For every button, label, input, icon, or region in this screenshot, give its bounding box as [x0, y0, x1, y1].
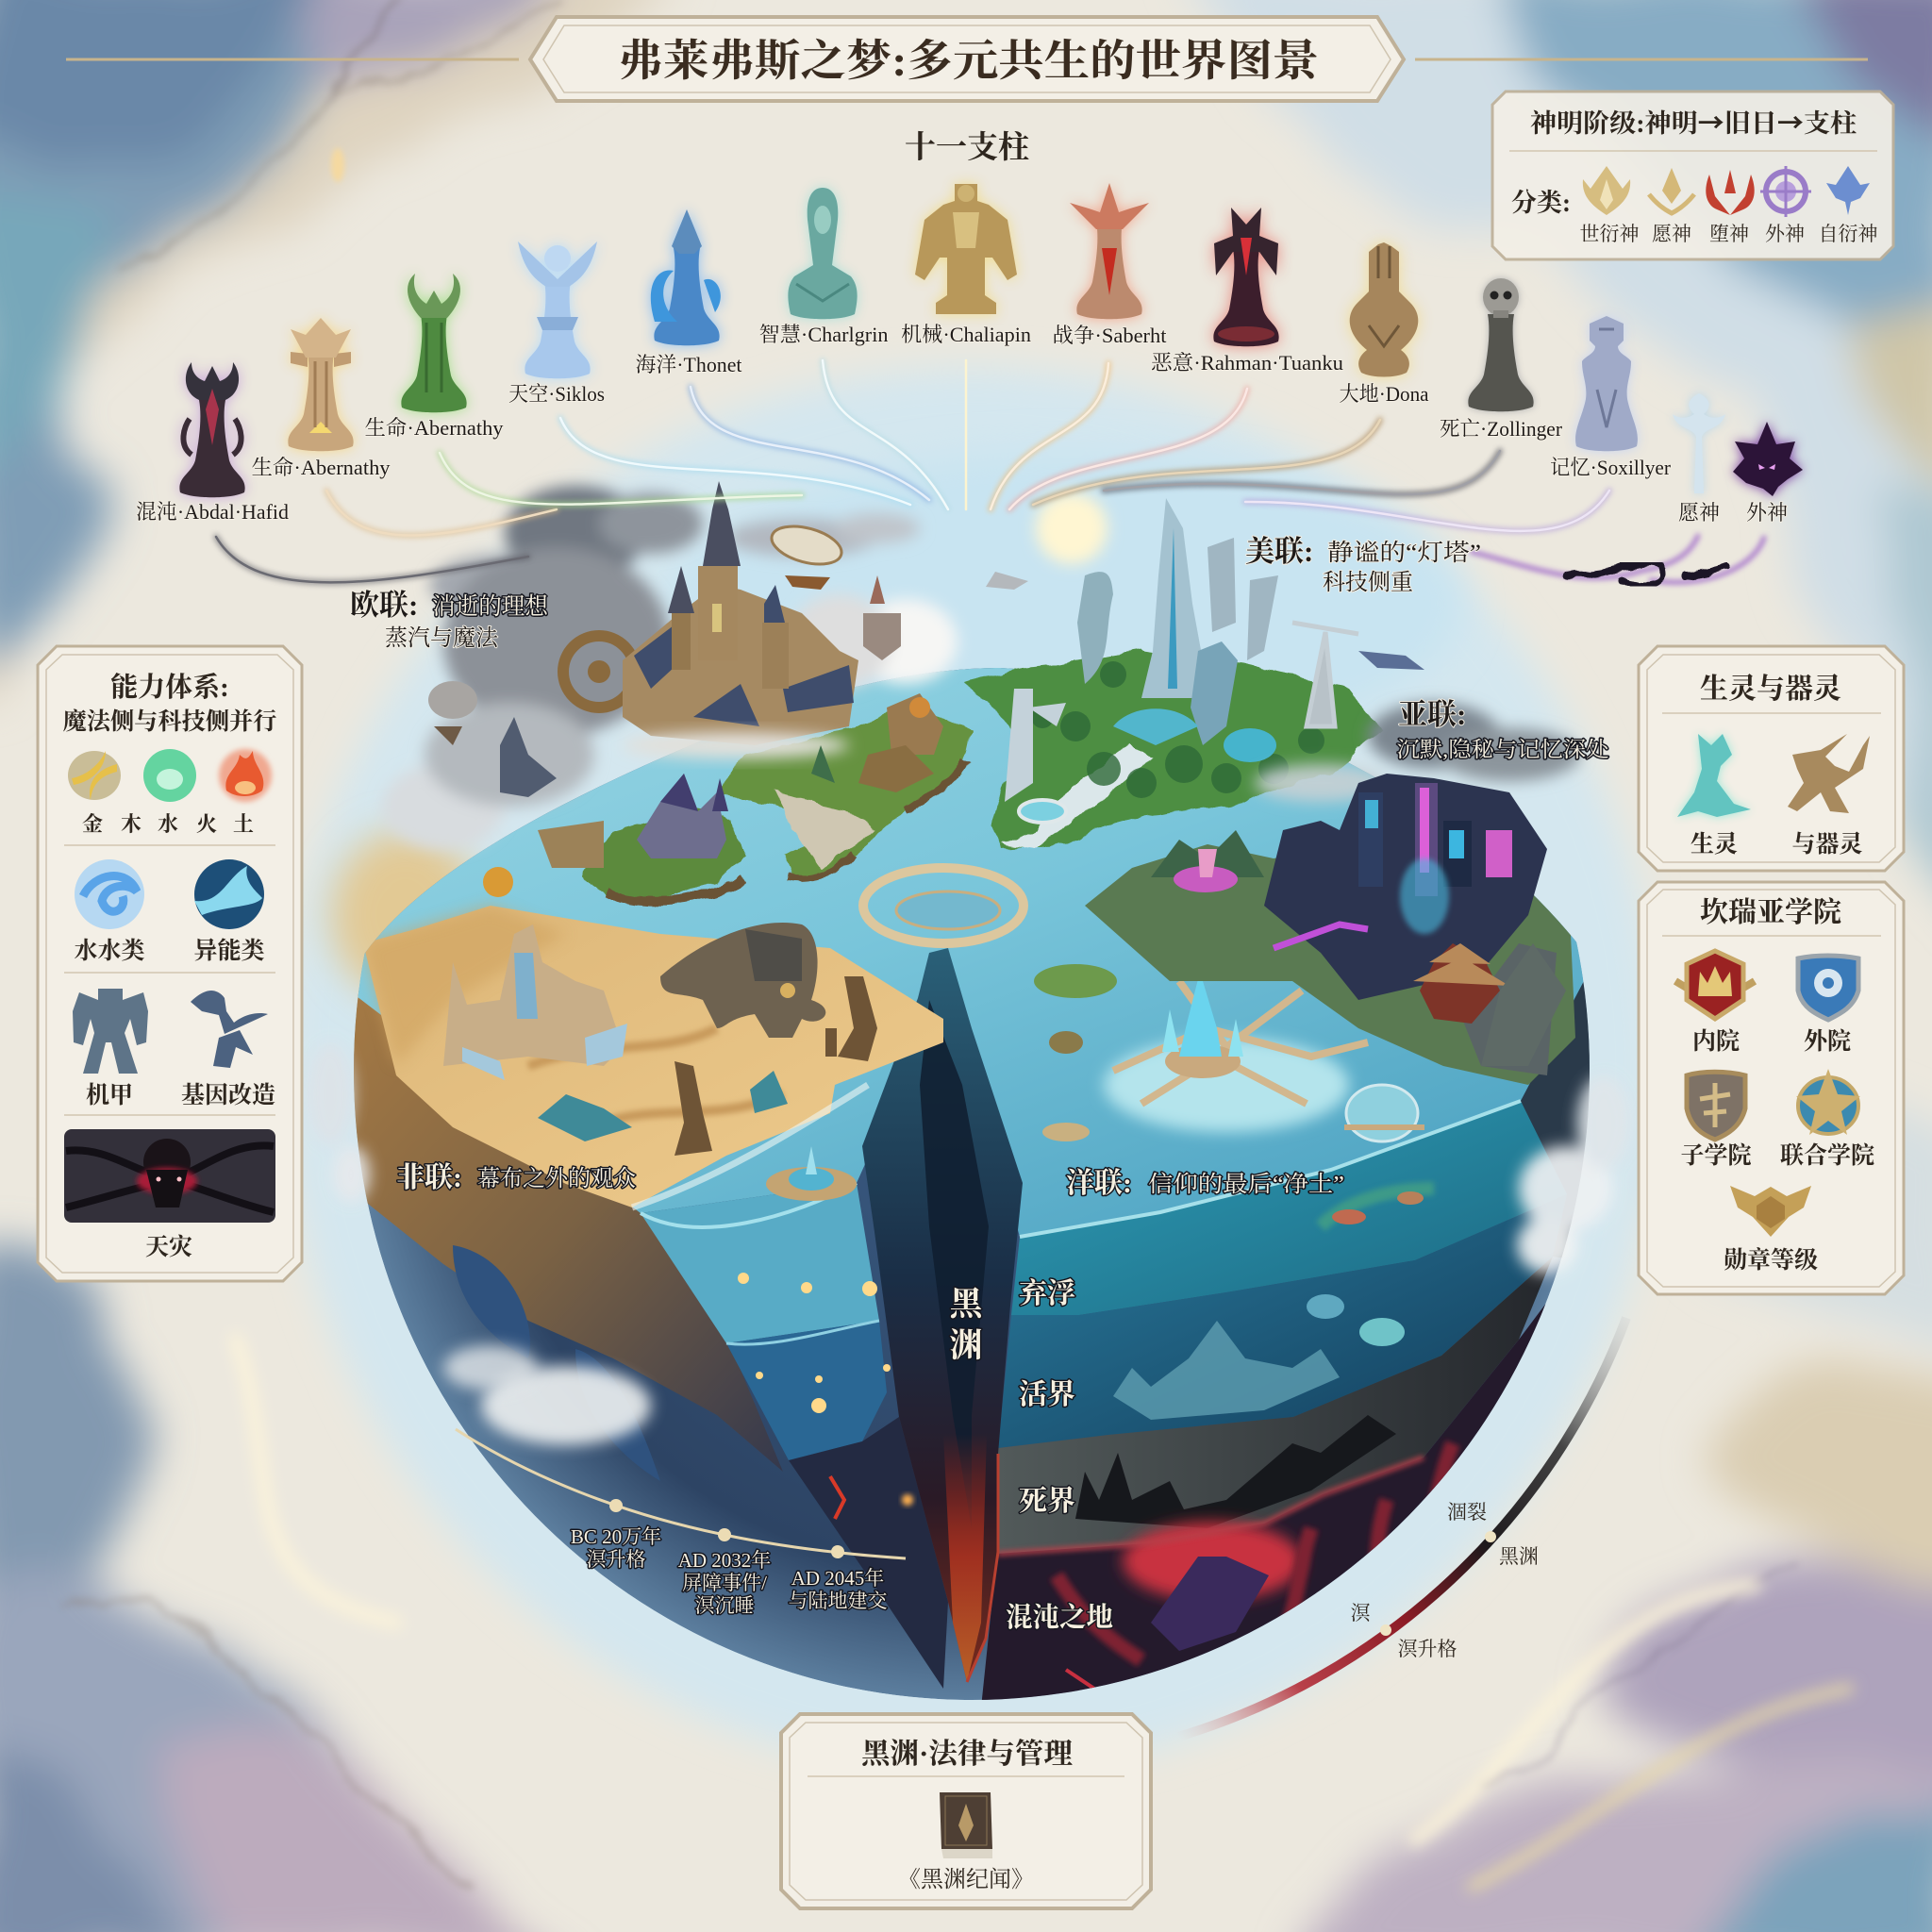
region label: 洋联: 洋联:: [1066, 1168, 1132, 1199]
sphere world map: [308, 441, 1630, 1707]
right layer: 混沌之地: [981, 1226, 1604, 1707]
Europe green land: [582, 703, 972, 902]
heading: 生灵与器灵: [1700, 674, 1841, 705]
lower rock beside chasm: [789, 1417, 948, 1689]
icon: 自衍神: [1826, 166, 1870, 215]
region label: 非联: 非联:: [396, 1162, 462, 1193]
statue: 外神 shadow: [1733, 422, 1803, 496]
map labels: [350, 535, 1609, 1633]
panel: 生灵与器灵: [1639, 646, 1904, 871]
icon: 机甲: [73, 989, 148, 1074]
label: 分类: 分类:: [1511, 189, 1571, 217]
fountain ring and small isles: [483, 867, 1117, 1201]
caption: 联合学院: 联合学院: [1780, 1142, 1874, 1169]
badge: 子学院: [1687, 1072, 1745, 1140]
region label: 欧联: 欧联:: [350, 589, 418, 622]
caption: 智慧: 智慧·Charlgrin: [758, 323, 889, 346]
floating castle islet: [863, 575, 901, 660]
region label: 美联: [1245, 535, 1481, 595]
panel: 黑渊·法律与管理: [781, 1714, 1151, 1908]
caption: 海洋: 海洋·Thonet: [636, 353, 741, 376]
caption: 记忆: 记忆·Soxillyer: [1550, 456, 1672, 479]
statue: 海洋: [651, 209, 721, 345]
statue: 天空: [518, 242, 597, 378]
caption: 天空: 天空·Siklos: [508, 382, 605, 406]
region label: 非联: 幕布之外的观众: [477, 1166, 636, 1191]
statue: 智慧: [788, 188, 858, 319]
chasm 黑渊: [862, 948, 1023, 1682]
title text: 弗莱弗斯之梦:多元共生的世界图景: [617, 37, 1320, 85]
layer label: 弃浮: 弃浮: [1019, 1278, 1075, 1309]
clouds behind Europe: [382, 486, 958, 849]
caption: 生命 1: 生命·Abernathy: [251, 456, 391, 479]
region label: 洋联: 信仰的最后“净土”: [1148, 1172, 1344, 1197]
icon: 外神: [1760, 166, 1811, 217]
caption: 世衍神: 世衍神: [1579, 223, 1640, 245]
event: AD 2032年: AD 2032年: [678, 1549, 771, 1572]
icon: 愿神: [1649, 168, 1694, 213]
caption: 恶意: 恶意·Rahman·Tuanku: [1151, 351, 1343, 375]
region label: 洋联: [1066, 1168, 1344, 1199]
icon: 生灵: [1677, 734, 1751, 817]
right layer: 死界: [997, 1257, 1553, 1554]
gothic chapel: [637, 774, 728, 858]
crystal platform 洋联: [1042, 972, 1424, 1141]
right layer: 弃浮: [1011, 1101, 1567, 1315]
abyss label: 黑渊: 黑: [949, 1286, 984, 1323]
left underwater block: [641, 1183, 891, 1460]
statue: 生命 tan: [288, 318, 354, 451]
region label: 欧联: 蒸汽与魔法: [385, 625, 499, 651]
abyss label: 黑渊: 渊: [949, 1327, 983, 1364]
icon: 异能类 orb: [194, 859, 264, 929]
line: 机械: [963, 360, 969, 509]
line: 智慧: [823, 360, 948, 509]
icon: 火: [219, 749, 272, 802]
airship: [768, 520, 845, 590]
panel: 能力体系: [38, 646, 302, 1281]
right layer: 活界: [998, 1194, 1567, 1448]
chronology arc: [1178, 1318, 1626, 1737]
timeline on globe: [456, 1429, 906, 1617]
arc label: 涸裂: [1447, 1501, 1487, 1524]
caption: 自衍神: 自衍神: [1819, 223, 1877, 245]
icon: 木: [143, 749, 196, 802]
badge: 联合学院: [1796, 1069, 1860, 1135]
region label: 欧联: [350, 589, 549, 651]
heading: 能力体系: 能力体系:: [110, 672, 229, 703]
icon: 水水类 orb: [75, 859, 144, 929]
heading: 黑渊·法律与管理: [861, 1739, 1073, 1770]
badge: 内院: [1675, 951, 1755, 1019]
caption: 异能类: 异能类: [193, 938, 265, 964]
region label: 非联: [396, 1162, 636, 1193]
icon: 世衍神: [1583, 166, 1630, 215]
arc label: 溟升格: [1398, 1638, 1457, 1660]
region label: 美联: 美联:: [1245, 535, 1313, 568]
statue: 机械: [915, 184, 1017, 314]
small airship and left isles: [428, 681, 604, 868]
caption: 生灵: 生灵: [1690, 831, 1738, 858]
pagoda: [1413, 943, 1566, 1066]
event: BC 20万年: [571, 1525, 661, 1571]
clouds over Asia: [1255, 703, 1580, 802]
icon: book: [940, 1792, 992, 1858]
town and bridge: [811, 693, 943, 792]
caption: 战争: 战争·Saberht: [1053, 324, 1166, 347]
icon: 器灵: [1788, 734, 1870, 813]
caption: 外神: 外神: [1765, 223, 1805, 245]
caption: 与器灵: 与器灵: [1791, 831, 1863, 858]
statue: 死亡: [1468, 278, 1534, 411]
caption: 混沌: 混沌·Abdal·Hafid: [136, 500, 289, 524]
layer label: 混沌之地: 混沌之地: [1006, 1602, 1113, 1633]
globe side clouds: [308, 1042, 1630, 1274]
line: 死亡: [1104, 451, 1500, 494]
captions: 五行: 金: [82, 812, 103, 836]
caption: 勋章等级: 勋章等级: [1724, 1247, 1818, 1274]
event: BC 20万年: 溟升格: [587, 1548, 645, 1571]
event: BC 20万年: BC 20万年: [571, 1525, 661, 1548]
statue: 恶意: [1213, 208, 1279, 346]
desert 非联: [363, 906, 943, 1208]
event: AD 2045年: [789, 1567, 887, 1612]
caption: 基因改造: 基因改造: [181, 1082, 275, 1108]
region label: 美联: 科技侧重: [1323, 570, 1413, 595]
caption: 生命 2: 生命·Abernathy: [364, 416, 504, 440]
icon: 堕神: [1706, 170, 1755, 215]
event: AD 2032年: 屏障事件/: [682, 1572, 767, 1594]
event: AD 2045年: 与陆地建交: [789, 1590, 887, 1612]
line: 海洋: [691, 387, 929, 500]
caption: 黑渊纪闻: 《黑渊纪闻》: [898, 1867, 1034, 1892]
caption: 机甲: 机甲: [86, 1082, 133, 1108]
line: 天空: [560, 418, 910, 505]
ocean surface: [349, 660, 1594, 1237]
mechanical beast: [660, 923, 825, 1038]
region label: 亚联: [1396, 698, 1609, 761]
caption: 堕神: 堕神: [1709, 223, 1749, 245]
desert totems and statues: [675, 976, 877, 1156]
pillar captions: [136, 323, 1788, 525]
event: AD 2032年: 溟沉睡: [694, 1594, 755, 1617]
caption: 死亡: 死亡·Zollinger: [1440, 417, 1563, 441]
captions: 五行: 水: [158, 812, 178, 836]
caption: 子学院: 子学院: [1680, 1142, 1752, 1169]
right dark rim below surface: [1521, 982, 1590, 1258]
caption: 愿神: 愿神: [1678, 501, 1720, 525]
panel: 坎瑞亚学院: [1639, 882, 1904, 1294]
line: 愿神与外神 dark smudge: [1472, 536, 1764, 585]
globe base: [354, 668, 1590, 1700]
badge: 勋章等级: [1730, 1186, 1811, 1237]
steampunk castle: [563, 481, 858, 758]
caption: 内院: 内院: [1692, 1028, 1740, 1055]
line: 生命 tan: [326, 491, 557, 536]
heading: 神明阶级: 神明阶级:神明→旧日→支柱: [1530, 103, 1857, 140]
icon: 基因改造: [191, 991, 268, 1068]
region label: 欧联: 消逝的理想: [432, 593, 549, 620]
image: 天灾 creature: [64, 1129, 275, 1223]
caption: 外院: 外院: [1804, 1028, 1851, 1055]
icon: 金: [68, 751, 121, 800]
caption: 天灾: 天灾: [145, 1234, 192, 1260]
arc label: 黑渊: [1499, 1545, 1539, 1568]
statue: 战争: [1070, 183, 1149, 319]
statue: 生命 green: [401, 274, 467, 412]
subheading: 魔法侧与科技侧并行: [62, 708, 277, 735]
captions: 五行: [82, 812, 254, 836]
event: AD 2032年: [678, 1549, 771, 1617]
divine connection lines: [216, 360, 1764, 585]
Asia land: [1085, 830, 1575, 1085]
captions: 五行: 木: [121, 812, 142, 836]
abyss label: 黑渊: [949, 1286, 984, 1364]
line: 恶意: [1009, 389, 1247, 509]
left flank earth and continents: [349, 981, 783, 1481]
line: 战争: [991, 363, 1108, 509]
statue: 记忆: [1575, 316, 1638, 451]
captions: 五行: 土: [233, 812, 254, 836]
statue: 大地: [1350, 242, 1418, 377]
cyber city: [1174, 774, 1547, 1000]
desert city: [443, 924, 627, 1080]
statue: 愿神 staff: [1673, 393, 1725, 493]
caption: 机械: 机械·Chaliapin: [901, 323, 1031, 346]
arc label: 溟: [1351, 1602, 1372, 1624]
forest canopy: [1031, 661, 1324, 798]
region label: 亚联: 沉默,隐秘与记忆深处: [1396, 738, 1609, 761]
caption: 外神: 外神: [1746, 501, 1788, 525]
caption: 水水类: 水水类: [74, 938, 145, 964]
line: 记忆: [1245, 491, 1609, 531]
layer label: 死界: 死界: [1019, 1486, 1075, 1517]
caption: 愿神: 愿神: [1652, 223, 1691, 245]
event: AD 2045年: AD 2045年: [791, 1567, 884, 1590]
panel: 神明阶级: [1492, 92, 1893, 259]
captions: 五行: 火: [196, 812, 217, 836]
region label: 美联: 静谧的“灯塔”: [1327, 540, 1481, 566]
heading: 坎瑞亚学院: [1700, 897, 1841, 928]
futuristic city: [986, 492, 1424, 823]
line: 混沌: [216, 537, 528, 582]
caption: 大地: 大地·Dona: [1340, 382, 1429, 406]
badge: 外院: [1798, 956, 1858, 1020]
title banner: [66, 17, 1868, 101]
statue: 混沌: [179, 362, 245, 497]
America land: [962, 651, 1382, 849]
line: 生命 green: [440, 453, 802, 505]
line: 大地: [1033, 420, 1380, 505]
region label: 亚联: 亚联:: [1398, 698, 1466, 731]
layer label: 活界: 活界: [1019, 1379, 1075, 1410]
heading: 十一支柱: 十一支柱: [905, 130, 1029, 165]
